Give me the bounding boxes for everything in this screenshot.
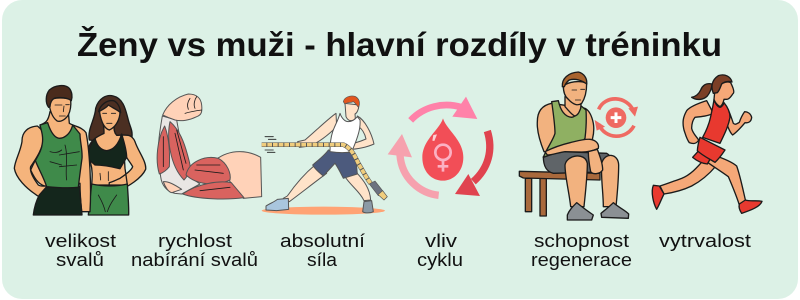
label: schopnost regenerace — [531, 231, 632, 270]
label: vytrvalost: vytrvalost — [659, 231, 751, 251]
title: Ženy vs muži - hlavní rozdíly v tréninku — [77, 26, 722, 63]
label: velikost svalů: velikost — [45, 231, 116, 251]
label: absolutní síla — [280, 231, 365, 270]
label: schopnost regenerace: regenerace — [531, 250, 632, 270]
label: vliv cyklu: cyklu — [417, 250, 463, 270]
label: vliv cyklu: vliv — [425, 231, 457, 251]
label: vliv cyklu — [417, 231, 463, 270]
label: rychlost nabírání svalů: rychlost — [158, 231, 232, 251]
label: rychlost nabírání svalů: nabírání svalů — [131, 250, 258, 270]
icon: menstrual cycle drop with arrows — [388, 97, 490, 196]
label: schopnost regenerace: schopnost — [534, 231, 629, 251]
label: absolutní síla: síla — [307, 250, 338, 270]
label: absolutní síla: absolutní — [280, 231, 365, 251]
icon: flexed arm with muscles — [157, 94, 262, 199]
label: rychlost nabírání svalů — [131, 231, 258, 270]
icon: seated man with recovery symbol — [519, 72, 638, 220]
icon: man and woman athletes — [14, 86, 146, 215]
label: velikost svalů — [45, 231, 116, 270]
icon: man pulling rope — [262, 96, 387, 215]
icon: woman runner — [652, 75, 762, 213]
label: velikost svalů: svalů — [56, 250, 104, 270]
